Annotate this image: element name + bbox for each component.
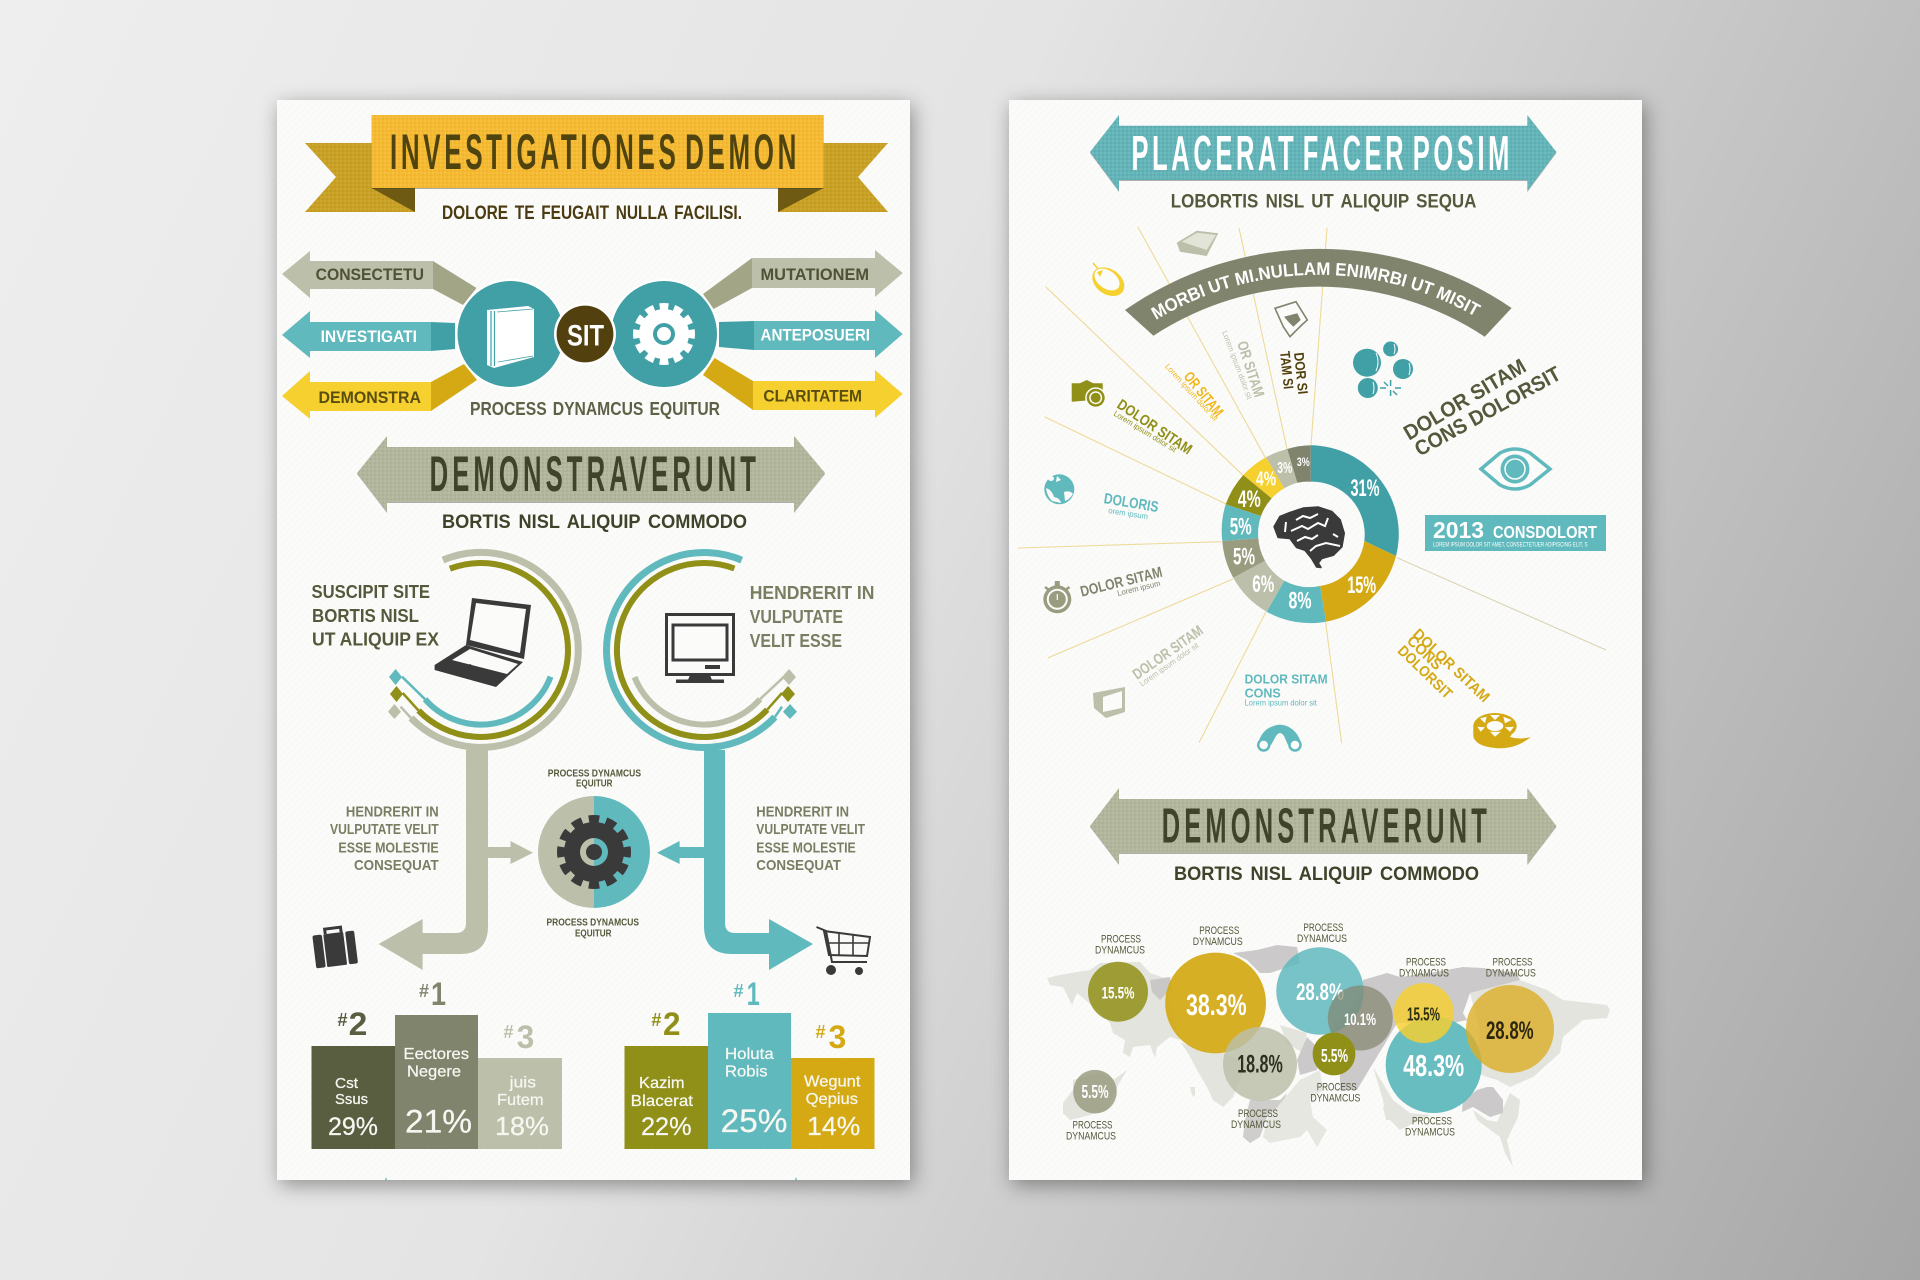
bubble: 18.8% beige — [1223, 1027, 1297, 1101]
donut percentages: 15% — [1347, 572, 1376, 599]
label: dolor sitam cons dolorsit dark: DOLOR SITAM — [1400, 355, 1530, 445]
bar chart: left podium — [312, 976, 562, 1149]
section banner: demonstraverunt (right) — [1090, 788, 1556, 864]
text block: hendrerit in: HENDRERIT IN — [750, 582, 874, 603]
icon: tv — [1093, 687, 1125, 718]
donut percentages: 3% — [1277, 460, 1292, 477]
icon: monitor — [666, 614, 734, 683]
text block: hendrerit left — [330, 804, 439, 874]
donut chart — [1222, 445, 1399, 623]
text block: hendrerit right: VULPUTATE VELIT — [756, 821, 865, 838]
chart: left concentric arcs — [388, 552, 578, 747]
callout: 2013 consdolort: 2013 — [1433, 517, 1484, 543]
bubble: 5.5% olive: 5.5% — [1321, 1046, 1348, 1066]
caption: gear top: EQUITUR — [576, 778, 613, 790]
arrow: consectetu: CONSECTETU — [316, 265, 424, 284]
icon: laptop — [435, 598, 531, 687]
label: dolor sitam cons teal: Lorem ipsum dolor sit — [1245, 699, 1318, 708]
arrow: investigati — [282, 311, 455, 358]
map labels: process dynamcus: PROCESS — [1199, 925, 1239, 937]
label: dor si tam si: TAM SI — [1277, 350, 1297, 390]
subtitle: bortis nisl (left): BORTIS NISL ALIQUIP COMMODO — [442, 511, 747, 533]
curved banner: morbi ut: MORBI UT MI.NULLAM ENIMRBI UT MISIT — [1150, 262, 1482, 320]
icon: shopping cart — [816, 927, 870, 975]
panel: left poster — [277, 100, 910, 1180]
rank labels: left podium: # — [338, 1010, 348, 1030]
bar labels: right podium: 22% — [641, 1113, 692, 1141]
text block: hendrerit right: HENDRERIT IN — [756, 804, 849, 821]
map labels: process dynamcus: DYNAMCUS — [1193, 936, 1243, 948]
rank labels: right podium: # — [651, 1010, 661, 1030]
donut percentages: 31% — [1350, 475, 1380, 502]
map labels: process dynamcus: PROCESS — [1406, 957, 1446, 969]
text block: hendrerit left: ESSE MOLESTIE — [338, 840, 439, 857]
text block: hendrerit in: VELIT ESSE — [750, 630, 842, 651]
section banner: demonstraverunt (right): DEMONSTRAVERUNT — [1162, 800, 1491, 854]
rank labels: left podium: 2 — [349, 1006, 367, 1042]
icon: mouse — [1087, 261, 1130, 302]
subtitle: bortis nisl (right): BORTIS NISL ALIQUIP COMMODO — [1174, 863, 1479, 885]
bar labels: left podium: Cst — [335, 1075, 359, 1092]
bubble: 5.5% grey: 5.5% — [1082, 1082, 1108, 1102]
icon: camera — [1072, 380, 1106, 408]
bubble: 15.5% yellow — [1394, 983, 1454, 1043]
map labels: process dynamcus: DYNAMCUS — [1310, 1093, 1360, 1105]
arrow: right stem to cart — [704, 750, 813, 970]
arrow: claritatem: CLARITATEM — [763, 387, 862, 406]
label: dolor sitam cons dolorsit gold: CONS — [1403, 632, 1445, 674]
subtitle: lobortis nisl: LOBORTIS NISL UT ALIQUIP SEQUA — [1171, 191, 1476, 213]
rank labels: left podium: # — [504, 1022, 514, 1042]
map labels: process dynamcus: PROCESS — [1317, 1081, 1357, 1093]
rank labels: right podium: # — [734, 981, 744, 1001]
title banner: placerat facer posim: PLACERAT FACER POSIM — [1132, 127, 1513, 181]
bubble: 28.8% gold: 28.8% — [1486, 1017, 1534, 1045]
bar labels: left podium: Eectores — [404, 1046, 469, 1063]
rank labels: right podium: 1 — [747, 976, 760, 1012]
map labels: process dynamcus: DYNAMCUS — [1095, 944, 1145, 956]
label: dolor sitam cons teal: DOLOR SITAM — [1245, 671, 1328, 686]
caption: gear bottom: EQUITUR — [575, 928, 612, 940]
map labels: process dynamcus: DYNAMCUS — [1399, 968, 1449, 980]
callout: 2013 consdolort: CONSDOLORT — [1493, 522, 1597, 542]
rank labels: left podium — [338, 976, 534, 1055]
bar labels: left podium: Ssus — [335, 1091, 368, 1108]
chart: right concentric arcs — [607, 553, 797, 748]
map labels: process dynamcus: DYNAMCUS — [1297, 933, 1347, 945]
text block: suscipit site: UT ALIQUIP EX — [312, 629, 440, 650]
title ribbon: investigationes demon — [305, 115, 888, 212]
bubble: 28.8% teal — [1276, 947, 1364, 1035]
map labels: process dynamcus — [1066, 922, 1536, 1142]
donut percentages: 4% — [1256, 468, 1276, 490]
bar labels: right podium: Robis — [725, 1064, 768, 1081]
map labels: process dynamcus: PROCESS — [1072, 1119, 1112, 1131]
callout: 2013 consdolort — [1425, 515, 1606, 551]
arrow: left branch to gear — [488, 841, 533, 864]
donut percentages: 3% — [1297, 455, 1310, 469]
rank labels: right podium: 3 — [828, 1019, 846, 1055]
bubble: 48.3% teal: 48.3% — [1403, 1048, 1464, 1083]
arrow: investigati: INVESTIGATI — [321, 327, 417, 346]
icon: notepad — [1177, 231, 1218, 256]
bar labels: left podium: 18% — [495, 1111, 549, 1141]
map labels: process dynamcus: DYNAMCUS — [1066, 1130, 1116, 1142]
caption: gear bottom — [546, 917, 639, 940]
arrow: mutationem — [703, 250, 903, 309]
icon: book in teal circle — [456, 279, 566, 389]
caption: gear top: PROCESS DYNAMCUS — [548, 768, 641, 780]
label: dor si tam si: DOR SI — [1291, 352, 1311, 395]
arrow: anteposueri: ANTEPOSUERI — [760, 326, 870, 345]
world map — [1047, 945, 1610, 1167]
arrow: demonstra: DEMONSTRA — [318, 388, 421, 407]
label: dolor sitam cons teal — [1245, 671, 1328, 708]
bar labels: left podium — [328, 1046, 549, 1141]
bar labels: right podium: 14% — [807, 1111, 860, 1141]
icon: globe — [1044, 474, 1074, 504]
bar labels: left podium: 21% — [405, 1104, 472, 1140]
text block: hendrerit right: ESSE MOLESTIE — [756, 840, 856, 857]
bubble: 28.8% gold — [1466, 985, 1554, 1073]
icon: central split gear — [538, 796, 650, 908]
label: or sitam yellow: OR SITAM — [1180, 369, 1226, 420]
map labels: process dynamcus: DYNAMCUS — [1486, 968, 1536, 980]
text block: suscipit site: SUSCIPIT SITE — [312, 581, 430, 602]
text block: hendrerit left: HENDRERIT IN — [346, 804, 439, 821]
text block: suscipit site — [312, 581, 440, 650]
arrow: mutationem: MUTATIONEM — [760, 265, 869, 284]
rank labels: left podium: 1 — [431, 976, 446, 1012]
title ribbon: investigationes demon: INVESTIGATIONES DEMON — [390, 124, 800, 180]
label: dolor sitam cons dolorsit dark: CONS DOLORSIT — [1411, 362, 1565, 461]
bubble: 10.1% grey: 10.1% — [1344, 1010, 1376, 1029]
donut percentages: 5% — [1230, 514, 1252, 540]
icon: gear in teal circle — [609, 279, 719, 389]
section banner: demonstraverunt (left): DEMONSTRAVERUNT — [430, 446, 760, 502]
label: dolor sitam cons dolorsit gold: DOLOR SITAM — [1409, 626, 1493, 706]
bubble: 15.5% olive: 15.5% — [1102, 983, 1134, 1002]
title banner: placerat facer posim — [1090, 115, 1556, 191]
bar labels: left podium: 29% — [328, 1113, 378, 1141]
arrow: consectetu — [282, 251, 476, 305]
caption: process dynamcus equitur: PROCESS DYNAMCUS EQUITUR — [470, 399, 720, 419]
bubble: 38.3% gold — [1165, 953, 1266, 1053]
label: dolor sitam olive: Lorem ipsum dolor sit — [1112, 409, 1179, 455]
donut percentages: 5% — [1233, 544, 1255, 570]
subtitle: dolore te feugait: DOLORE TE FEUGAIT NULLA FACILISI. — [442, 202, 742, 224]
badge: sit: SIT — [567, 320, 604, 352]
icon: stopwatch — [1043, 581, 1071, 613]
bubble: 15.5% olive — [1088, 962, 1148, 1022]
donut percentages: 8% — [1288, 588, 1312, 614]
badge: sit — [554, 303, 616, 365]
label: dor si tam si — [1277, 350, 1311, 395]
rank labels: right podium: 2 — [663, 1006, 680, 1042]
map labels: process dynamcus: DYNAMCUS — [1231, 1119, 1281, 1131]
bar labels: right podium: Qepius — [806, 1091, 858, 1108]
text block: hendrerit left: VULPUTATE VELIT — [330, 821, 439, 838]
bubble: 28.8% teal: 28.8% — [1296, 979, 1344, 1006]
bubble: 15.5% yellow: 15.5% — [1407, 1005, 1440, 1025]
icon: map card — [1275, 302, 1307, 337]
bar labels: right podium: Kazim — [639, 1075, 685, 1092]
icon: bubbles — [1353, 342, 1413, 398]
map labels: process dynamcus: PROCESS — [1303, 922, 1343, 934]
donut percentages: 6% — [1252, 571, 1274, 598]
label: dolor sitam cons dolorsit gold: DOLORSIT — [1394, 642, 1455, 703]
bubble: 5.5% grey — [1073, 1070, 1117, 1113]
donut percentages: 4% — [1238, 486, 1261, 513]
text block: hendrerit in: VULPUTATE — [750, 606, 843, 627]
bar labels: right podium: 25% — [721, 1103, 787, 1139]
bar labels: left podium: juis — [509, 1075, 536, 1092]
bar labels: right podium: Holuta — [725, 1046, 774, 1063]
map labels: process dynamcus: PROCESS — [1492, 957, 1532, 969]
label: dolor sitam beige: DOLOR SITAM — [1130, 622, 1206, 683]
bubble: 18.8% beige: 18.8% — [1237, 1051, 1283, 1079]
caption: gear top — [548, 768, 641, 790]
caption: gear bottom: PROCESS DYNAMCUS — [546, 917, 639, 929]
callout: 2013 consdolort: LOREM IPSUM DOLOR SIT AMET, CONSECTETUER ADIPISCING ELIT, S — [1433, 543, 1588, 549]
arrow: right branch to gear — [657, 841, 704, 864]
icon: suitcase — [312, 926, 358, 968]
label: dolor sitam stopwatch: DOLOR SITAM — [1079, 564, 1164, 601]
bubble: 10.1% grey — [1328, 986, 1393, 1050]
arrow: claritatem — [703, 358, 903, 418]
text block: hendrerit left: CONSEQUAT — [354, 857, 439, 874]
icon: binoculars — [1257, 725, 1302, 750]
bubble: 5.5% olive — [1313, 1033, 1355, 1075]
bubble: 48.3% teal — [1386, 1017, 1482, 1113]
text block: suscipit site: BORTIS NISL — [312, 605, 419, 626]
rank labels: right podium — [651, 976, 846, 1055]
rank labels: left podium: # — [419, 981, 429, 1001]
rank labels: right podium: # — [816, 1022, 826, 1042]
label: or sitam beige: Lorem ipsum dolor sit — [1220, 330, 1254, 401]
map labels: process dynamcus: PROCESS — [1101, 933, 1141, 945]
text block: hendrerit right — [756, 804, 865, 874]
map labels: process dynamcus: DYNAMCUS — [1405, 1126, 1455, 1138]
label: doloris: orem ipsum — [1108, 506, 1149, 521]
rank labels: left podium: 3 — [517, 1019, 534, 1055]
curved banner: morbi ut — [1125, 248, 1512, 337]
label: dolor sitam beige — [1130, 622, 1206, 688]
icon: brain — [1274, 507, 1344, 567]
label: dolor sitam cons teal: CONS — [1245, 685, 1281, 700]
map labels: process dynamcus: PROCESS — [1238, 1108, 1278, 1120]
label: doloris: DOLORIS — [1103, 490, 1160, 516]
label: or sitam yellow: Lorem ipsum dolor sit — [1163, 362, 1220, 423]
rays around donut — [1018, 227, 1606, 743]
text block: hendrerit right: CONSEQUAT — [756, 857, 841, 874]
panel: right poster — [1009, 100, 1642, 1180]
arrow: left stem to suitcase — [379, 750, 488, 970]
arrow: demonstra — [282, 364, 477, 419]
section banner: demonstraverunt (left) — [357, 436, 825, 512]
label: dolor sitam stopwatch: Lorem ipsum — [1116, 579, 1162, 598]
bar labels: right podium: Wegunt — [804, 1074, 861, 1091]
donut percentages — [1230, 455, 1380, 614]
label: dolor sitam olive: DOLOR SITAM — [1114, 396, 1195, 458]
text block: hendrerit in — [750, 582, 874, 651]
label: dolor sitam beige: Lorem ipsum dolor sit — [1138, 640, 1201, 688]
arrow: anteposueri — [719, 310, 903, 358]
icon: eye — [1481, 449, 1550, 489]
map labels: process dynamcus: PROCESS — [1412, 1115, 1452, 1127]
bar labels: right podium: Blacerat — [631, 1093, 694, 1110]
bar labels: left podium: Negere — [407, 1064, 461, 1081]
bar chart: right podium — [624, 976, 874, 1149]
bar labels: right podium — [631, 1046, 861, 1141]
label: or sitam beige: OR SITAM — [1233, 339, 1267, 399]
icon: film reel — [1473, 713, 1531, 748]
bubble: 38.3% gold: 38.3% — [1186, 989, 1247, 1022]
bar labels: left podium: Futem — [497, 1092, 544, 1109]
